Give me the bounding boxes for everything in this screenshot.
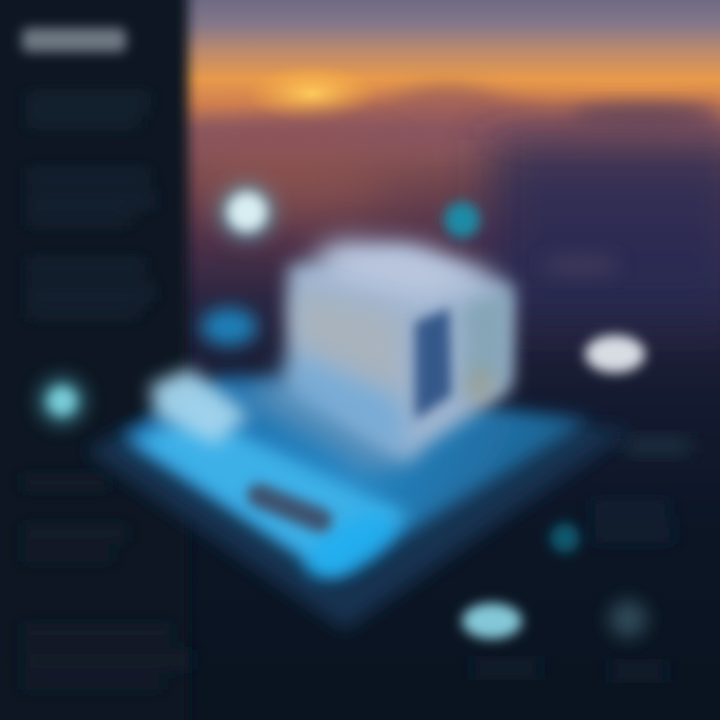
sidebar text block 3	[26, 262, 156, 315]
platform surface	[120, 375, 590, 575]
building doorway	[415, 308, 452, 420]
right text block: upper	[625, 438, 690, 454]
building right face	[462, 288, 510, 405]
icon: grey circle	[609, 600, 647, 638]
sidebar heading	[22, 28, 126, 52]
icon: cyan pill	[462, 603, 522, 639]
block stack	[240, 370, 425, 475]
building: central isometric block	[285, 240, 512, 460]
building lower blue haze	[285, 350, 410, 460]
panel: left sidebar	[0, 0, 195, 720]
right text block: lower	[590, 505, 675, 539]
building roof	[310, 240, 505, 300]
icon: white pill	[585, 335, 645, 373]
left raised block	[150, 368, 250, 445]
platform: isometric tablet	[85, 368, 630, 630]
bottom text block: centre	[470, 662, 542, 674]
building left face	[295, 290, 402, 400]
icon: teal circle	[444, 202, 480, 238]
sidebar text block 5	[20, 628, 195, 687]
sidebar text block 4	[20, 478, 130, 559]
platform shadow edge	[85, 395, 630, 630]
icon: cyan circle	[36, 375, 88, 427]
dark pill button	[243, 480, 336, 536]
sidebar text block 1	[26, 96, 151, 124]
sidebar text block 2	[26, 172, 156, 223]
bottom text block: right	[608, 665, 668, 677]
icon: white circle	[217, 182, 277, 242]
icon: teal dot	[550, 523, 580, 553]
platform bright highlight	[130, 415, 410, 575]
icon: blue badge	[201, 308, 257, 346]
